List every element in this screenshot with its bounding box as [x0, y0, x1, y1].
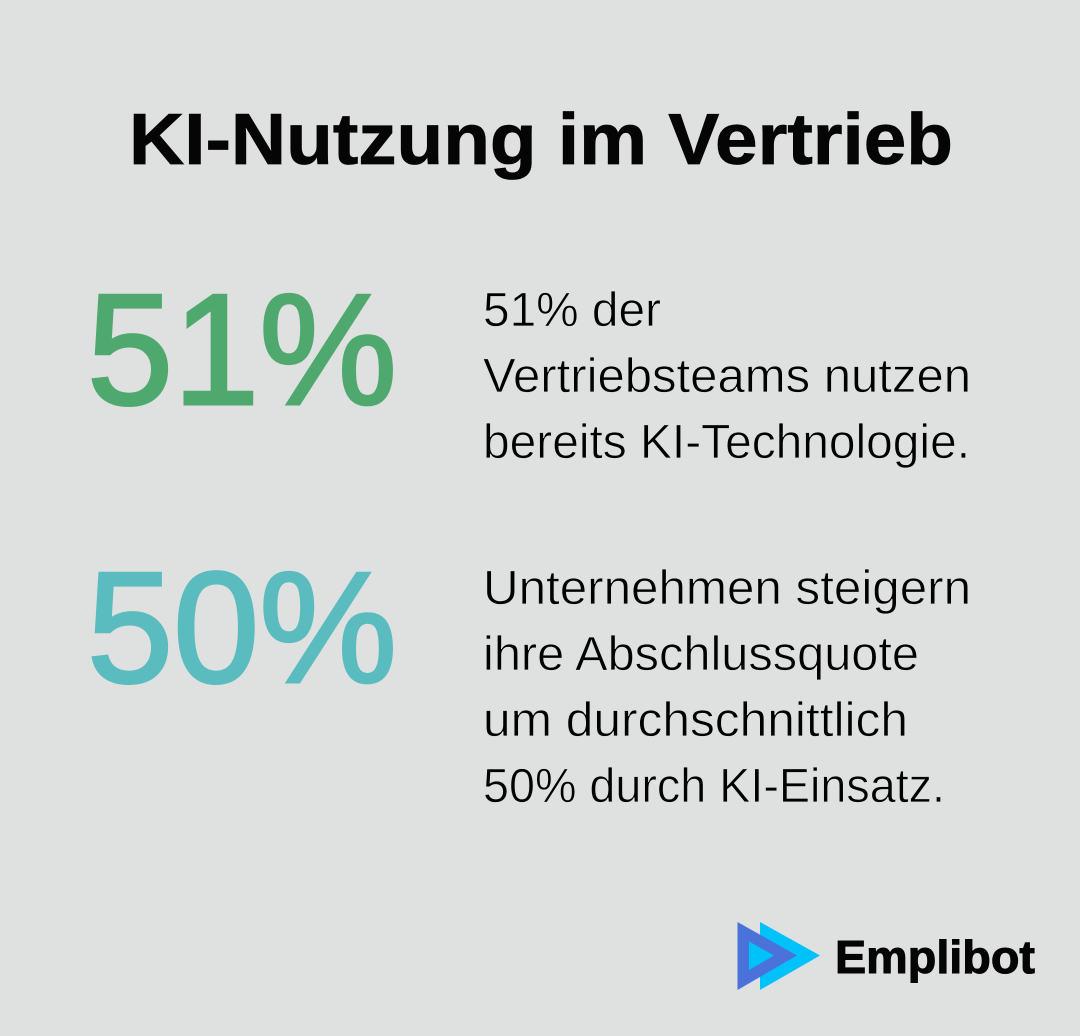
text block: 51% description: 51% der [483, 284, 661, 337]
text block: 51% description: bereits KI-Technologie. [483, 416, 970, 469]
logo wordmark: Emplibot [835, 931, 1035, 983]
text block: 50% description: 50% durch KI-Einsatz. [483, 760, 945, 813]
text block: 50% description: um durchschnittlich [483, 694, 908, 747]
icon: play triangles [738, 922, 820, 990]
text block: 51% description: Vertriebsteams nutzen [483, 350, 971, 403]
text block: 50% description: ihre Abschlussquote [483, 628, 919, 681]
title: KI-Nutzung im Vertrieb [129, 100, 953, 180]
text block: 50% description: Unternehmen steigern [483, 562, 971, 615]
logo: Emplibot [738, 922, 1035, 990]
text block: 50% description [483, 562, 971, 813]
stat: 51%: 51% [87, 262, 397, 438]
stat: 50%: 50% [87, 540, 397, 716]
text block: 51% description [483, 284, 971, 469]
